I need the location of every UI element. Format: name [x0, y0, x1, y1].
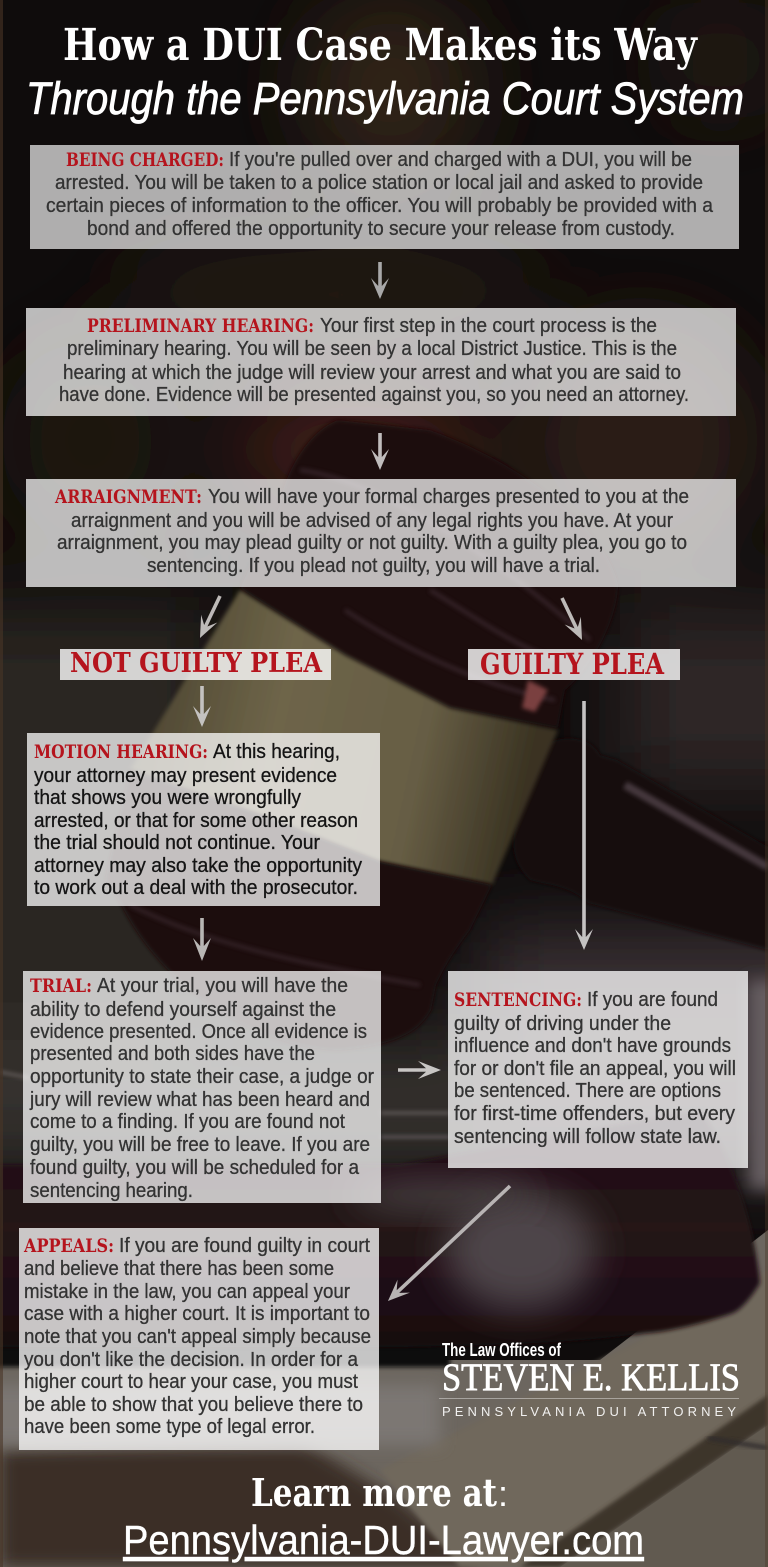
arrow: charged to preliminary [371, 262, 389, 299]
panel: being charged: BEING CHARGED: [66, 149, 224, 171]
panel: appeals: and believe that there has been some [24, 1257, 334, 1280]
panel: appeals [19, 1228, 379, 1450]
panel: sentencing: If you are found [587, 988, 718, 1011]
arrow: not guilty to motion hearing [193, 686, 211, 727]
logo: law offices of Steven E. Kellis: The Law Offices of [442, 1340, 562, 1360]
panel: appeals: you don't like the decision. In order for a [24, 1348, 359, 1371]
panel: trial: found guilty, you will be scheduled for a [30, 1156, 360, 1179]
panel: motion hearing: arrested, or that for some other reason [34, 809, 358, 832]
panel: motion hearing: to work out a deal with the prosecutor. [34, 876, 358, 899]
panel: appeals: APPEALS: [23, 1235, 114, 1257]
panel: trial: come to a finding. If you are found not [30, 1110, 345, 1133]
panel: trial: jury will review what has been heard and [29, 1088, 370, 1111]
sound block [0, 1110, 760, 1347]
call to action: learn more: Pennsylvania-DUI-Lawyer.com [123, 1517, 644, 1563]
panel: motion hearing: MOTION HEARING: [34, 741, 208, 763]
panel: trial: evidence presented. Once all evidence is [30, 1020, 367, 1043]
panel: trial: opportunity to state their case, a judge or [30, 1065, 374, 1088]
panel: appeals: higher court to hear your case, you must [24, 1370, 358, 1393]
panel: trial: guilty, you will be free to leave. If you are [30, 1133, 370, 1156]
panel: arraignment: ARRAIGNMENT: [54, 486, 202, 508]
panel: arraignment: arraignment and you will be advised of any legal rights you have. At your [71, 509, 673, 532]
streak highlights [0, 1072, 450, 1137]
gavel head lower [105, 770, 492, 1050]
panel: sentencing: for or don't file an appeal, you will [454, 1057, 736, 1080]
panel: being charged: arrested. You will be taken to a police station or local jail and asked to provide [55, 171, 703, 194]
arrow: trial to sentencing [398, 1061, 441, 1079]
panel: trial: At your trial, you will have the [97, 974, 348, 997]
panel: appeals: mistake in the law, you can appeal your [24, 1280, 350, 1303]
panel: arraignment [26, 479, 736, 587]
panel: appeals: If you are found guilty in court [119, 1234, 370, 1257]
panel: motion hearing: your attorney may present evidence [34, 764, 337, 787]
panel: arraignment: You will have your formal charges presented to you at the [208, 485, 689, 508]
panel: motion hearing [27, 733, 380, 906]
panel: sentencing: for first-time offenders, but every [454, 1102, 736, 1125]
call to action: learn more [123, 1470, 644, 1563]
panel: motion hearing: At this hearing, [213, 740, 340, 763]
arrow: motion hearing to trial [193, 918, 211, 961]
panel: sentencing: be sentenced. There are options [454, 1079, 721, 1102]
panel: sentencing [448, 971, 748, 1168]
gavel handle [513, 738, 768, 950]
arrow: to not guilty plea [192, 592, 228, 642]
panel: sentencing: SENTENCING: [454, 989, 582, 1011]
panel: preliminary hearing: PRELIMINARY HEARING: [87, 315, 314, 337]
panel: motion hearing: that shows you were wrongfully [34, 786, 302, 809]
panel: arraignment: sentencing. If you plead not guilty, you will have a trial. [147, 554, 600, 577]
panel: appeals: be able to show that you believe there to [24, 1393, 363, 1416]
title [26, 20, 744, 124]
call to action: learn more: Learn more at [251, 1470, 497, 1515]
panel: appeals: have been some type of legal error. [24, 1415, 315, 1438]
arrow: guilty to sentencing [575, 701, 593, 950]
arrow: sentencing to appeals [382, 1179, 516, 1308]
panel: sentencing: sentencing will follow state law. [454, 1125, 721, 1148]
label: not guilty plea: NOT GUILTY PLEA [70, 648, 323, 679]
panel: preliminary hearing: preliminary hearing. You will be seen by a local District Justice. This is the [67, 337, 677, 360]
panel: appeals: case with a higher court. It is important to [24, 1302, 370, 1325]
label: guilty plea: GUILTY PLEA [480, 647, 664, 681]
panel: trial: presented and both sides have the [30, 1042, 315, 1065]
gavel head cap [240, 420, 618, 728]
panel: sentencing: influence and don't have grounds [454, 1034, 731, 1057]
panel: being charged: certain pieces of information to the officer. You will probably be provided with a [46, 194, 714, 217]
panel: sentencing: guilty of driving under the [454, 1012, 671, 1035]
panel: preliminary hearing: have done. Evidence will be presented against you, so you need an attorney. [59, 383, 689, 406]
panel: being charged [30, 145, 739, 249]
panel: preliminary hearing [26, 308, 736, 416]
panel: arraignment: arraignment, you may plead guilty or not guilty. With a guilty plea, you go to [57, 531, 687, 554]
logo: law offices of Steven E. Kellis: PENNSYLVANIA DUI ATTORNEY [442, 1404, 736, 1419]
panel: appeals: note that you can't appeal simply because [24, 1325, 371, 1348]
panel: motion hearing: attorney may also take the opportunity [34, 854, 363, 877]
panel: preliminary hearing: hearing at which the judge will review your arrest and what you are said to [63, 361, 681, 384]
arrow: to guilty plea [554, 594, 590, 644]
gavel gold band [130, 590, 558, 885]
arrow: preliminary to arraignment [371, 433, 389, 470]
panel: motion hearing: the trial should not continue. Your [34, 831, 320, 854]
panel: being charged: bond and offered the opportunity to secure your release from custody. [87, 217, 675, 240]
panel: being charged: If you're pulled over and charged with a DUI, you will be [229, 148, 692, 171]
panel: trial [23, 971, 381, 1203]
logo: law offices of Steven E. Kellis [439, 1340, 740, 1419]
panel: trial: ability to defend yourself against the [30, 998, 336, 1021]
panel: preliminary hearing: Your first step in the court process is the [320, 314, 657, 337]
table and book [0, 1230, 768, 1567]
call to action: learn more: : [498, 1473, 508, 1514]
panel: trial: sentencing hearing. [30, 1179, 193, 1202]
panel: trial: TRIAL: [30, 975, 92, 997]
